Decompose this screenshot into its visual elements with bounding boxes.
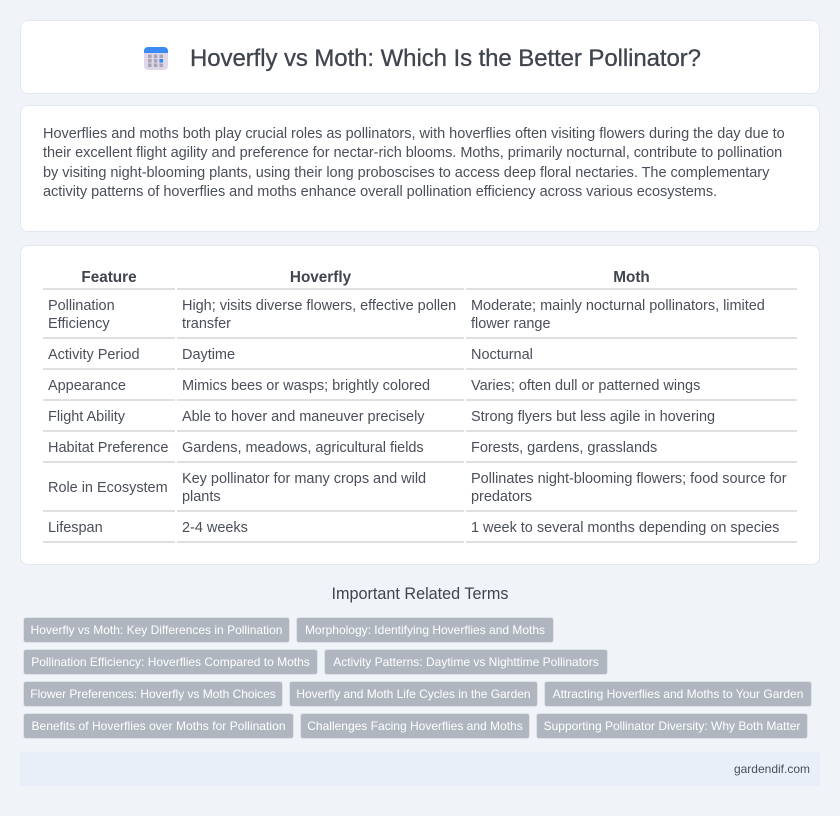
text: introduction paragraph: Hoverflies and moths both play crucial roles as pollinators, with hoverflies often visiting flowers during the day due to — [43, 126, 785, 142]
table row: Pollination Efficiency: Moderate; mainly nocturnal pollinators, limited — [471, 298, 765, 314]
text: introduction paragraph: their excellent flight agility and preference for nectar-rich blooms. Moths, primarily nocturnal, contribute to pollination — [43, 145, 782, 161]
tag: Attracting Hoverflies and Moths to Your Garden — [553, 687, 803, 701]
tag: Benefits of Hoverflies over Moths for Pollination — [31, 719, 286, 733]
tag — [23, 617, 290, 643]
table row: Flight Ability — [48, 409, 715, 425]
table row: Pollination Efficiency: transfer — [182, 316, 231, 332]
table row: Appearance: Appearance — [48, 378, 126, 394]
table row: Pollination Efficiency: flower range — [471, 316, 550, 332]
tag — [300, 713, 530, 739]
table: header row: Moth — [613, 269, 650, 286]
heading: important related terms: Important Related Terms — [332, 585, 508, 603]
tag — [536, 713, 808, 739]
title: Hoverfly vs Moth: Which Is the Better Pollinator? — [190, 45, 701, 72]
tag — [23, 713, 294, 739]
table row: Pollination Efficiency: High; visits diverse flowers, effective pollen — [182, 298, 456, 314]
tag: Activity Patterns: Daytime vs Nighttime Pollinators — [333, 655, 599, 669]
table row: Role in Ecosystem: Role in Ecosystem — [48, 480, 168, 496]
panel: comparison table — [20, 245, 820, 565]
tag: Hoverfly vs Moth: Key Differences in Pollination — [31, 623, 282, 637]
table row: Lifespan: 2-4 weeks — [182, 520, 248, 536]
footer — [20, 752, 820, 786]
table row: Activity Period: Activity Period — [48, 347, 140, 363]
tag — [544, 681, 812, 707]
table row: Activity Period — [48, 347, 533, 363]
table row: Pollination Efficiency: Pollination — [48, 298, 115, 314]
tag list: related terms — [23, 617, 812, 739]
table row: Lifespan — [48, 520, 779, 536]
panel: title header — [20, 20, 820, 94]
table row: Lifespan: Lifespan — [48, 520, 103, 536]
table row: Flight Ability: Flight Ability — [48, 409, 125, 425]
tag — [296, 617, 554, 643]
table row: Habitat Preference: Gardens, meadows, agricultural fields — [182, 440, 424, 456]
table row: Lifespan: 1 week to several months depending on species — [471, 520, 779, 536]
table row: Flight Ability: Strong flyers but less agile in hovering — [471, 409, 715, 425]
tag — [23, 681, 283, 707]
tag: Supporting Pollinator Diversity: Why Both Matter — [544, 719, 800, 733]
table: header row: Feature — [81, 269, 137, 286]
table row: Role in Ecosystem: plants — [182, 489, 221, 505]
tag — [23, 649, 318, 675]
tag — [289, 681, 538, 707]
table row: Role in Ecosystem: Key pollinator for many crops and wild — [182, 471, 426, 487]
tag: Flower Preferences: Hoverfly vs Moth Choices — [30, 687, 276, 701]
table: header row — [81, 269, 650, 286]
text: introduction paragraph — [43, 126, 785, 200]
tag: Morphology: Identifying Hoverflies and Moths — [305, 623, 545, 637]
table row: Activity Period: Daytime — [182, 347, 235, 363]
footer text: source: gardendif.com — [734, 762, 810, 776]
table row: Habitat Preference — [48, 440, 657, 456]
table row: Appearance — [48, 378, 700, 394]
table row: Role in Ecosystem — [48, 471, 786, 505]
table row: Pollination Efficiency — [48, 298, 765, 332]
text: introduction paragraph: activity patterns of hoverflies and moths enhance overall pollination efficiency across various ecosystems. — [43, 184, 717, 200]
table row: Role in Ecosystem: Pollinates night-blooming flowers; food source for — [471, 471, 786, 487]
tag — [324, 649, 608, 675]
table row: Appearance: Mimics bees or wasps; brightly colored — [182, 378, 430, 394]
table row: Pollination Efficiency: Efficiency — [48, 316, 110, 332]
table row: Activity Period: Nocturnal — [471, 347, 533, 363]
text: introduction paragraph: by visiting night-blooming plants, using their long proboscises to access deep floral nectaries. The complementary — [43, 165, 769, 181]
tag: Pollination Efficiency: Hoverflies Compared to Moths — [31, 655, 310, 669]
icon: calendar — [144, 47, 168, 70]
tag: Challenges Facing Hoverflies and Moths — [307, 719, 523, 733]
table: header row: Hoverfly — [290, 269, 351, 286]
table row: Appearance: Varies; often dull or patterned wings — [471, 378, 700, 394]
tag: Hoverfly and Moth Life Cycles in the Garden — [296, 687, 531, 701]
table row: Flight Ability: Able to hover and maneuver precisely — [182, 409, 425, 425]
table row: Habitat Preference: Forests, gardens, grasslands — [471, 440, 657, 456]
table row: Habitat Preference: Habitat Preference — [48, 440, 168, 456]
panel: introduction — [20, 105, 820, 232]
table row: Role in Ecosystem: predators — [471, 489, 532, 505]
